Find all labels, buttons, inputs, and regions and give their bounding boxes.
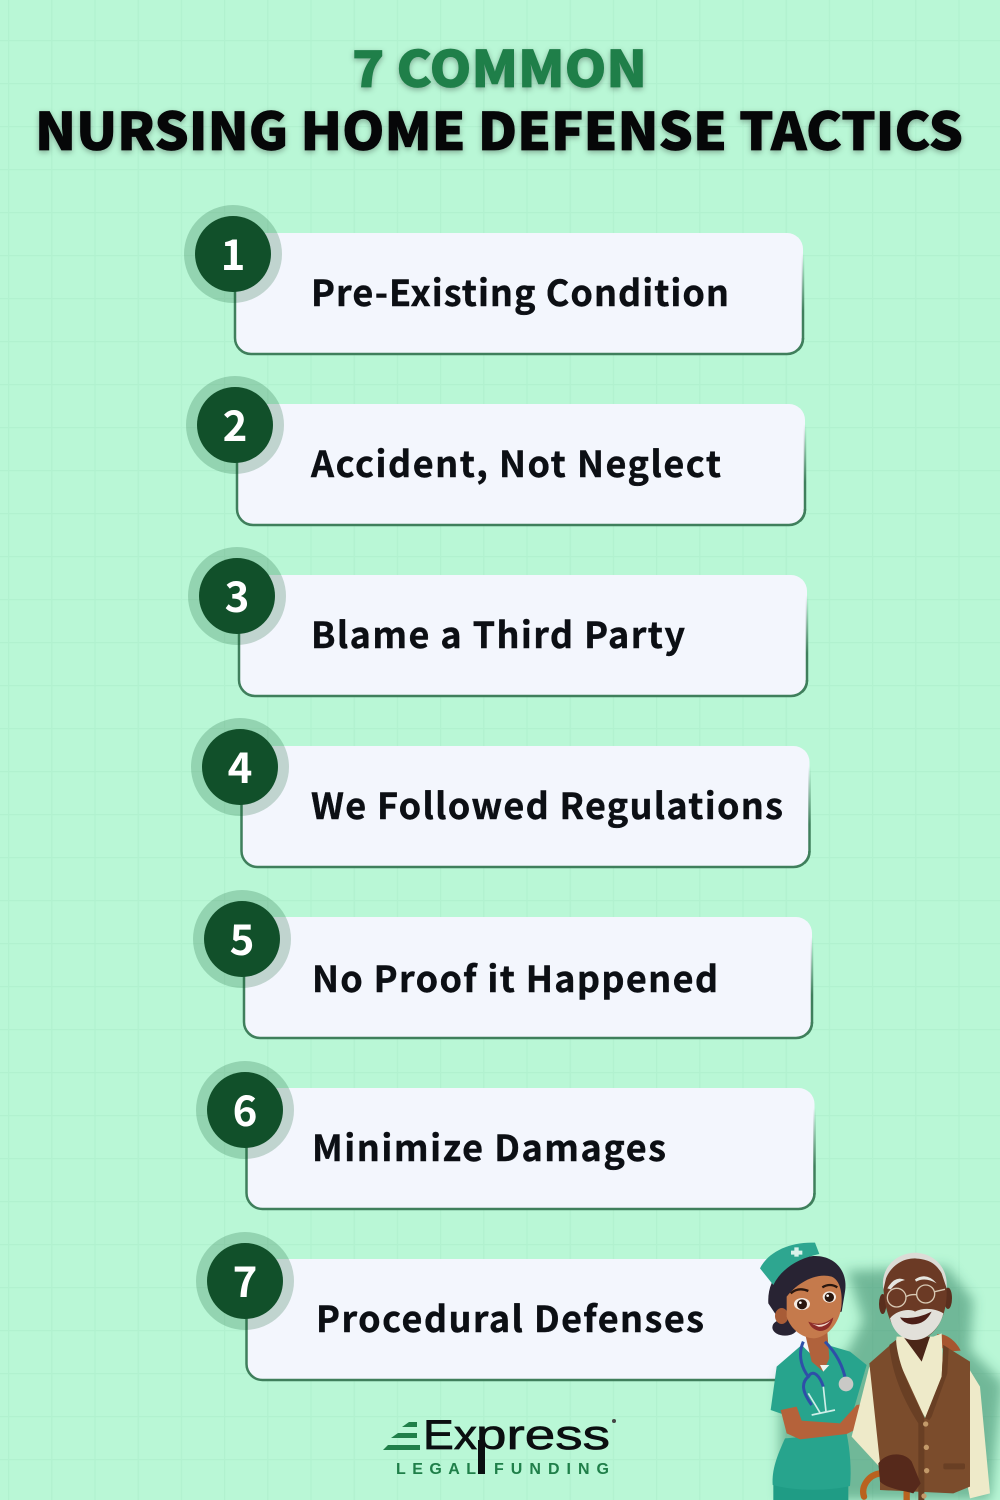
- number badge 5: 5: [230, 907, 254, 968]
- logo funding: FUNDING: [494, 1461, 609, 1478]
- eyes: [791, 1285, 837, 1310]
- illustration: nurse and elderly man: [760, 1243, 1000, 1500]
- label 7: Procedural Defenses: [316, 1291, 704, 1343]
- sleeve right: [957, 1365, 990, 1498]
- item 3: [188, 547, 807, 696]
- number badge 1: [184, 205, 282, 303]
- number badge 4: 4: [228, 735, 252, 796]
- cap: [760, 1243, 819, 1285]
- number badge 1: 1: [221, 222, 245, 283]
- buttons: [921, 1421, 929, 1499]
- number badge 7: [196, 1232, 294, 1330]
- card 1: [235, 233, 803, 354]
- stethoscope: [801, 1342, 853, 1415]
- head: [883, 1256, 947, 1340]
- smile: [808, 1317, 833, 1331]
- number badge 3: [188, 547, 286, 645]
- bun: [772, 1319, 798, 1336]
- pocket: [943, 1463, 965, 1469]
- number badge 6: 6: [233, 1078, 257, 1139]
- title line 1: 7 COMMON: [352, 30, 647, 102]
- card 2: [237, 404, 805, 525]
- card 5: [244, 917, 812, 1038]
- logo stripes: [383, 1422, 420, 1450]
- card 4: [242, 746, 810, 867]
- hand on cane: [878, 1454, 921, 1493]
- upper tunic: [771, 1345, 867, 1433]
- number badge 5: [193, 890, 291, 988]
- mouth: [900, 1312, 932, 1324]
- item 4: [191, 718, 810, 867]
- number badge 2: 2: [223, 393, 247, 454]
- title: [35, 30, 963, 165]
- item 1: [184, 205, 803, 354]
- item 6: [196, 1061, 815, 1209]
- sleeve left: [852, 1367, 899, 1467]
- item 5: [193, 890, 812, 1038]
- label 3: Blame a Third Party: [311, 607, 685, 659]
- card 6: [246, 1088, 815, 1209]
- logo p stem: [478, 1440, 485, 1474]
- collar white: [820, 1365, 829, 1372]
- beard: [890, 1309, 943, 1340]
- number badge 6: [196, 1061, 294, 1159]
- number badge 2: [186, 376, 284, 474]
- number badge 3: 3: [225, 564, 249, 625]
- card 7: [246, 1259, 814, 1380]
- logo wordmark start: Ex: [423, 1411, 477, 1458]
- logo wordmark end: press: [476, 1411, 610, 1458]
- cane: [863, 1473, 907, 1500]
- item 2: [186, 376, 805, 525]
- label 1: Pre-Existing Condition: [311, 265, 729, 317]
- nurse: [760, 1243, 876, 1500]
- hair: [883, 1253, 947, 1290]
- number badge 7: 7: [233, 1249, 257, 1310]
- face: [787, 1276, 842, 1338]
- hand on shoulder: [937, 1334, 961, 1352]
- logo: [383, 1411, 616, 1478]
- glasses: [887, 1285, 945, 1307]
- vest band: [889, 1340, 949, 1500]
- logo legal: LEGAL: [396, 1461, 476, 1478]
- shirt: [893, 1333, 943, 1420]
- title line 2: NURSING HOME DEFENSE TACTICS: [35, 90, 963, 165]
- arm: [781, 1403, 876, 1439]
- logo registered mark: [612, 1419, 616, 1423]
- soft shadow: [780, 1267, 1000, 1500]
- item 7: [196, 1232, 814, 1380]
- label 2: Accident, Not Neglect: [310, 436, 721, 488]
- ear: [775, 1308, 788, 1324]
- label 4: We Followed Regulations: [311, 778, 783, 830]
- hair: [768, 1256, 846, 1327]
- label 5: No Proof it Happened: [312, 951, 718, 1003]
- pants: [773, 1483, 848, 1500]
- neck: [805, 1332, 829, 1372]
- eyebrows: [887, 1276, 937, 1289]
- cap cross: [791, 1247, 802, 1257]
- neck shadow: [903, 1337, 930, 1362]
- label 6: Minimize Damages: [312, 1120, 666, 1172]
- lower tunic: [773, 1433, 851, 1490]
- elderly man: [852, 1253, 990, 1500]
- number badge 4: [191, 718, 289, 816]
- card 3: [239, 575, 807, 696]
- vest: [869, 1340, 970, 1493]
- ears: [879, 1288, 952, 1314]
